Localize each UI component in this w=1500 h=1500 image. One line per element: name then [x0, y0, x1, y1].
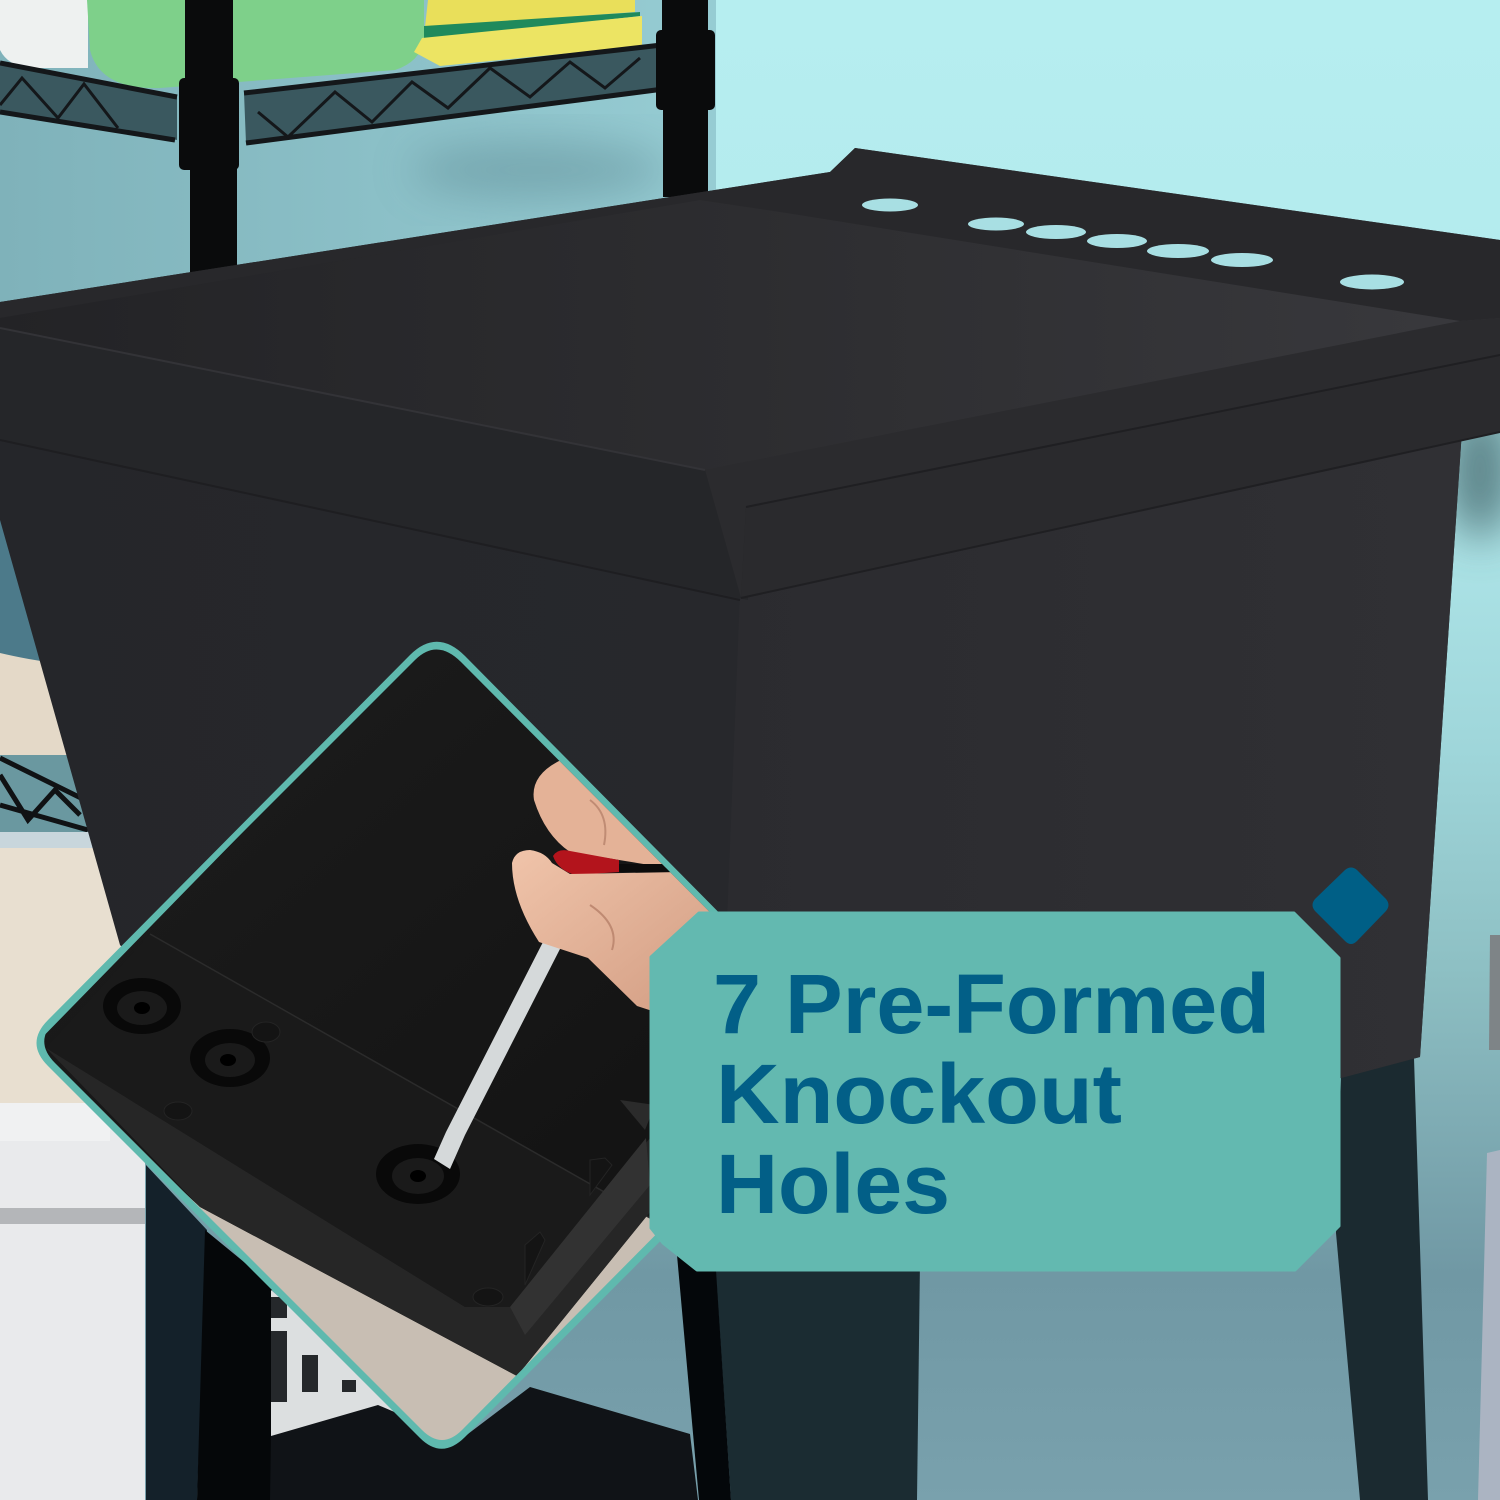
- sink corner tab: [620, 1100, 650, 1130]
- wall behind: [0, 500, 145, 1110]
- laundry sink: [0, 148, 1500, 1180]
- hand: lower finger: [512, 850, 710, 1010]
- back deck: [0, 148, 1500, 321]
- center leg: [715, 1260, 920, 1500]
- front rim right: [741, 355, 1500, 598]
- wire shelf: [0, 43, 679, 143]
- small bosses: [164, 1022, 612, 1306]
- callout: feature label: [651, 913, 1339, 1270]
- knockout plug 1: [103, 978, 181, 1034]
- sink body: [0, 430, 1462, 1180]
- heading line 3: Holes: [716, 1137, 950, 1231]
- right leg: [1336, 1058, 1428, 1500]
- inset frame: [36, 642, 853, 1449]
- screwdriver shaft: [434, 942, 561, 1169]
- left leg: [146, 1165, 207, 1500]
- inset: knockout detail: [36, 642, 718, 1449]
- folded towel: [0, 653, 85, 770]
- rim bevel right: [705, 318, 1500, 598]
- right edge objects: [1478, 935, 1500, 1500]
- icon: accent diamond: [1312, 868, 1388, 944]
- knockout plug 2: [190, 1029, 270, 1087]
- left side: towels and bucket: [0, 500, 145, 1500]
- laundry basket: [271, 1290, 420, 1440]
- stack of towels: [0, 848, 125, 1103]
- bottle: white: [0, 0, 88, 68]
- bottle: green: [87, 0, 424, 88]
- shelf with cleaning supplies: [0, 0, 715, 273]
- front rim left: [0, 328, 748, 600]
- blue towel: [0, 500, 60, 665]
- support post: [197, 1230, 272, 1500]
- lower band: [647, 1213, 650, 1217]
- underside panel: [44, 650, 710, 1376]
- white bucket: [0, 1103, 145, 1500]
- lower wire shelf: [0, 755, 90, 835]
- knockout holes: [862, 198, 1404, 290]
- floor rack: [270, 1387, 698, 1500]
- heading line 2: Knockout: [716, 1047, 1122, 1141]
- sink wall edge: [46, 1048, 650, 1376]
- knockout plug 3: [376, 1144, 460, 1204]
- sponges: [414, 0, 642, 66]
- wood floor: [92, 1100, 655, 1440]
- shelf posts: [179, 0, 715, 273]
- screwdriver handle: [553, 850, 670, 874]
- sink top face: [0, 148, 1500, 472]
- hand: upper finger: [534, 760, 666, 868]
- heading line 1: 7 Pre-Formed: [713, 957, 1270, 1051]
- callout panel: [651, 913, 1339, 1270]
- sink legs: [146, 1058, 1428, 1500]
